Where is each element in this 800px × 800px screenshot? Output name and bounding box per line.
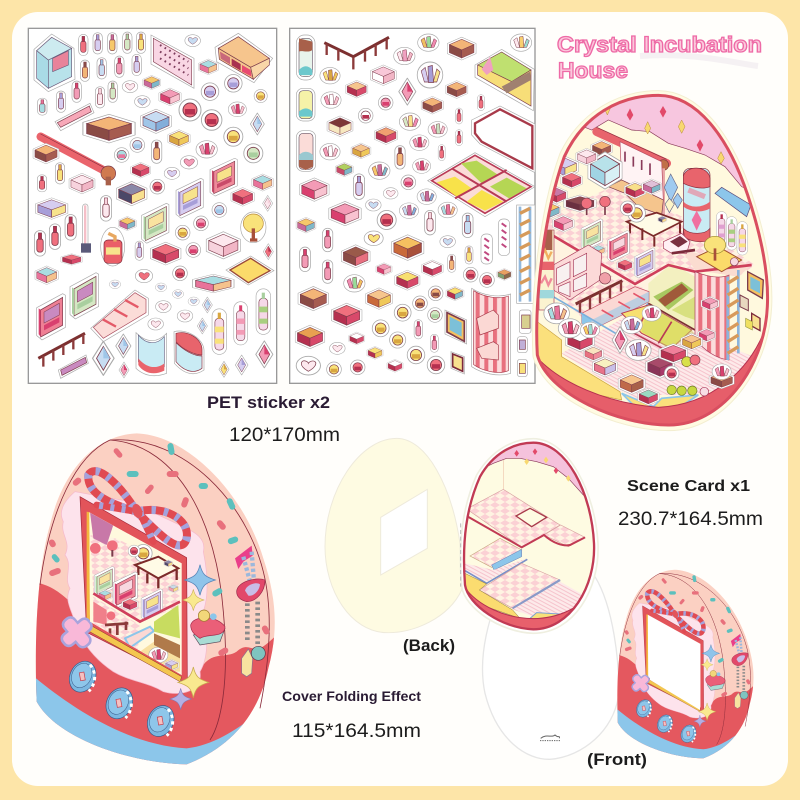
picture frame stickers: [445, 310, 531, 377]
crane head sticker: [101, 166, 116, 185]
arcade machine sticker: [34, 34, 75, 92]
yellow wall: [535, 320, 622, 400]
jars and small icons: [37, 35, 267, 330]
cart: [663, 233, 695, 253]
shelves on floor: [581, 219, 603, 250]
panel: PET sticker sheet 1: [28, 28, 277, 383]
lower floor: [562, 303, 753, 407]
front cover sheet: [483, 577, 619, 759]
left pillar: [539, 230, 554, 310]
pink strip sticker: [55, 103, 94, 131]
diamonds wall: [664, 174, 682, 213]
ceiling: [585, 96, 744, 188]
corner railing sticker: [324, 37, 389, 69]
glass cylinder: [683, 168, 710, 242]
label: back: (Back): [403, 636, 455, 655]
four-pane floor sticker: [428, 153, 535, 217]
crystal diamonds: [93, 113, 273, 378]
label: cover folding effect: Cover Folding Effect: [282, 689, 422, 704]
field sticker: [475, 49, 534, 111]
wall frames: [740, 272, 763, 331]
tall tube stickers: [212, 289, 271, 354]
upper floor: [548, 188, 754, 282]
white window: [648, 616, 700, 710]
fold line: [459, 523, 462, 587]
floor divider red: [554, 234, 752, 286]
heading: Crystal Incubation House: House: [558, 58, 628, 83]
table: [627, 213, 682, 247]
ladder: [728, 270, 738, 360]
ladder sticker: [517, 205, 535, 303]
crane arm sticker: [41, 134, 111, 174]
window scene: [648, 263, 695, 330]
egg halo: [532, 91, 772, 431]
label: sticker size: 120*170mm: [229, 425, 340, 446]
thin lamp sticker: [81, 204, 91, 253]
small strip sticker: [58, 355, 88, 378]
panel: unfolded scene card: [325, 437, 619, 759]
heart strip stickers: [481, 219, 510, 264]
pixel scene in window: [89, 512, 182, 675]
label: front: (Front): [587, 750, 647, 769]
panel: front view of folded cover: [614, 570, 758, 763]
panel: assembled scene egg: [532, 90, 772, 432]
middle level: [535, 227, 695, 337]
crystal cluster stickers: [320, 34, 532, 292]
striped shelf sticker: [472, 288, 511, 375]
scene inner sheet: [460, 437, 600, 637]
label: scene card size: 230.7*164.5mm: [618, 509, 763, 530]
assorted box stickers: [35, 59, 273, 293]
round cabinet sticker: [174, 331, 204, 374]
bottom band: [541, 336, 762, 424]
railing sticker: [38, 333, 85, 367]
jars and icons: [296, 95, 494, 377]
left wall shelves: [553, 245, 602, 300]
ceiling diamonds: [606, 108, 725, 164]
striped cylinder: [695, 272, 729, 360]
tree sticker: [241, 212, 266, 243]
railing: [576, 281, 622, 313]
tube stickers: [296, 35, 316, 171]
tubes and shelf: [715, 187, 751, 255]
bottle stickers: [34, 32, 162, 260]
panel: cover folding effect illustration: [30, 433, 283, 772]
heading: Crystal Incubation House: Crystal Incubation: [557, 32, 762, 57]
glass panel sticker: [136, 333, 167, 376]
crane: [597, 127, 669, 215]
lower shop clutter: [544, 303, 734, 405]
stairs: [582, 287, 649, 330]
yellow floor sticker: [226, 256, 274, 285]
box stickers: [295, 37, 512, 372]
pegboard sticker: [151, 35, 194, 88]
machine sticker: [101, 227, 125, 266]
shelf stickers: [37, 158, 237, 340]
back room clutter: [620, 142, 663, 200]
crane base sticker: [33, 143, 59, 164]
label: PET sticker x2: PET sticker x2: [207, 394, 330, 412]
egg red outline: [537, 95, 768, 425]
long cabinet sticker: [215, 33, 273, 83]
blank window sticker: [472, 106, 535, 173]
heading: Crystal Incubation House: [557, 32, 762, 83]
stairs sticker: [91, 290, 148, 342]
back cover sheet: [325, 438, 462, 633]
label: scene card x1: Scene Card x1: [627, 478, 750, 495]
label: cover size: 115*164.5mm: [292, 721, 421, 742]
tree on platform: [697, 236, 742, 272]
panel: PET sticker sheet 2: [290, 28, 535, 383]
